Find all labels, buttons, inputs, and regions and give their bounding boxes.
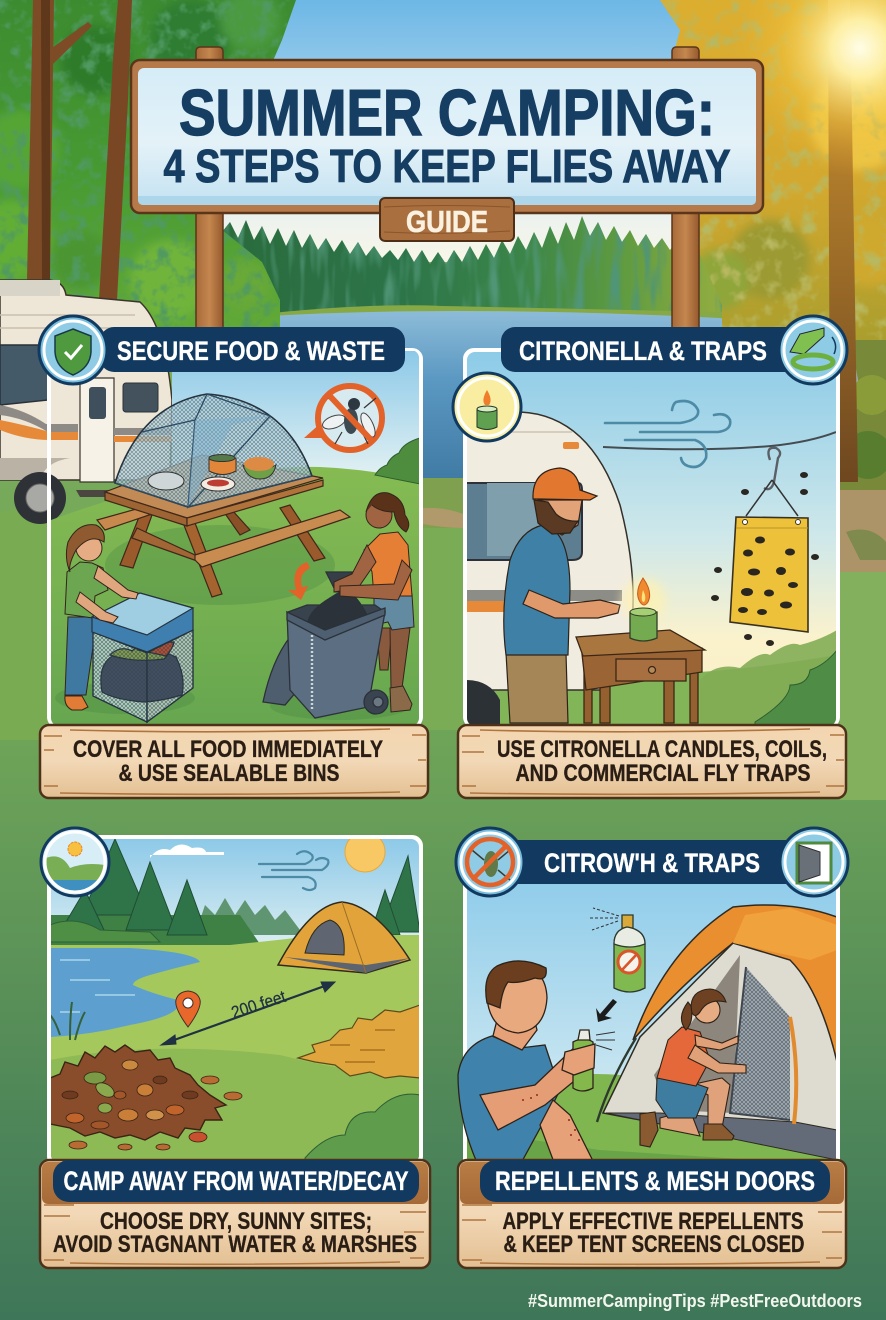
panel 3 caption (40, 1160, 430, 1268)
left tree canopy (0, 0, 300, 345)
panel 2 caption: AND COMMERCIAL FLY TRAPS (516, 760, 810, 787)
title sign (131, 60, 763, 213)
panel 1 caption (40, 725, 428, 798)
guide badge: GUIDE (406, 204, 488, 239)
panel 4 header (478, 840, 823, 884)
picnic table (97, 455, 350, 597)
scene (466, 351, 837, 730)
lake (268, 311, 840, 482)
bite marks (522, 1095, 580, 1140)
sign posts (196, 47, 699, 332)
tent fly (633, 905, 837, 1062)
left grass under the RV (0, 510, 50, 740)
trash can with bag (263, 572, 388, 718)
forest across the lake (224, 216, 722, 312)
title line two: 4 STEPS TO KEEP FLIES AWAY (164, 140, 730, 192)
right sunlit canopy (660, 0, 886, 345)
panel 3 caption: AVOID STAGNANT WATER & MARSHES (53, 1231, 417, 1258)
scene (466, 870, 837, 1165)
panel 3 caption: CAMP AWAY FROM WATER/DECAY (64, 1166, 408, 1196)
icon: sunny site (40, 828, 110, 900)
right shore trees and dirt (838, 340, 886, 490)
panel 1 caption: COVER ALL FOOD IMMEDIATELY (73, 736, 383, 763)
person covering the bin: body (65, 525, 108, 710)
person covering the bin: arms (76, 566, 138, 623)
icon: shield check (39, 316, 107, 384)
no-fly icon (304, 386, 382, 450)
man with spray (458, 961, 615, 1165)
guide badge (380, 198, 514, 241)
left pine trunks (27, 0, 54, 280)
panel 2: citronella and traps (453, 350, 838, 730)
RV behind panel one (0, 280, 172, 524)
panel 1 header (100, 327, 405, 372)
title line one: SUMMER CAMPING: (179, 76, 715, 149)
red arrow (288, 562, 310, 600)
icon: candle (453, 373, 521, 441)
citronella candle (622, 578, 666, 641)
panel 4 caption: APPLY EFFECTIVE REPELLENTS (502, 1208, 804, 1235)
panel 1 caption: & USE SEALABLE BINS (118, 760, 340, 787)
panel 4 caption: REPELLENTS & MESH DOORS (495, 1166, 815, 1196)
panel 4 caption (458, 1160, 846, 1268)
trash person arms (334, 545, 412, 600)
dry grass pile (298, 1005, 420, 1078)
sun glow (730, 0, 886, 178)
panel 2 header (501, 327, 816, 372)
repellent spray can (590, 908, 645, 992)
panel 4 caption: & KEEP TENT SCREENS CLOSED (504, 1231, 804, 1258)
shoreline patch between the panels (423, 478, 463, 540)
scene: sky and grass (51, 351, 420, 730)
scene (50, 832, 420, 1165)
tent (278, 902, 410, 973)
man lighting candle (504, 468, 620, 723)
right pine trunk (828, 0, 858, 482)
big tent body (602, 944, 836, 1130)
trailer (466, 412, 633, 690)
person with trash bag (364, 493, 414, 712)
side table (576, 630, 705, 723)
mesh food dome (115, 394, 312, 507)
panel 1 header: SECURE FOOD & WASTE (117, 336, 385, 366)
black arrow (596, 999, 617, 1022)
icon: snapping trap (779, 316, 847, 384)
hashtags: #SummerCampingTips #PestFreeOutdoors (528, 1291, 862, 1311)
leaf pile (50, 1045, 226, 1140)
wind lines (259, 851, 328, 890)
panel 3 caption: CHOOSE DRY, SUNNY SITES; (100, 1208, 372, 1235)
icon: mesh door (780, 828, 848, 896)
panel 3: camp away from water and decay (40, 828, 421, 1165)
panel 4 header: CITROW'H & TRAPS (544, 848, 760, 878)
reeds (50, 1002, 85, 1040)
panel 4: repellents and mesh doors (457, 884, 840, 1160)
food (148, 472, 184, 490)
distance arrow: 200 feet (229, 987, 288, 1022)
map pin (176, 991, 200, 1027)
bushes (305, 1094, 420, 1165)
wind lines (605, 401, 730, 467)
woman at the tent door (640, 989, 746, 1147)
hanging fly trap (711, 448, 819, 646)
panel 2 caption (458, 725, 846, 798)
panel 2 header: CITRONELLA & TRAPS (519, 336, 767, 366)
mesh food bin (92, 593, 193, 722)
distance arrow (161, 982, 335, 1045)
icon: no fly (456, 828, 524, 896)
panel 1: secure food and waste (49, 350, 421, 730)
